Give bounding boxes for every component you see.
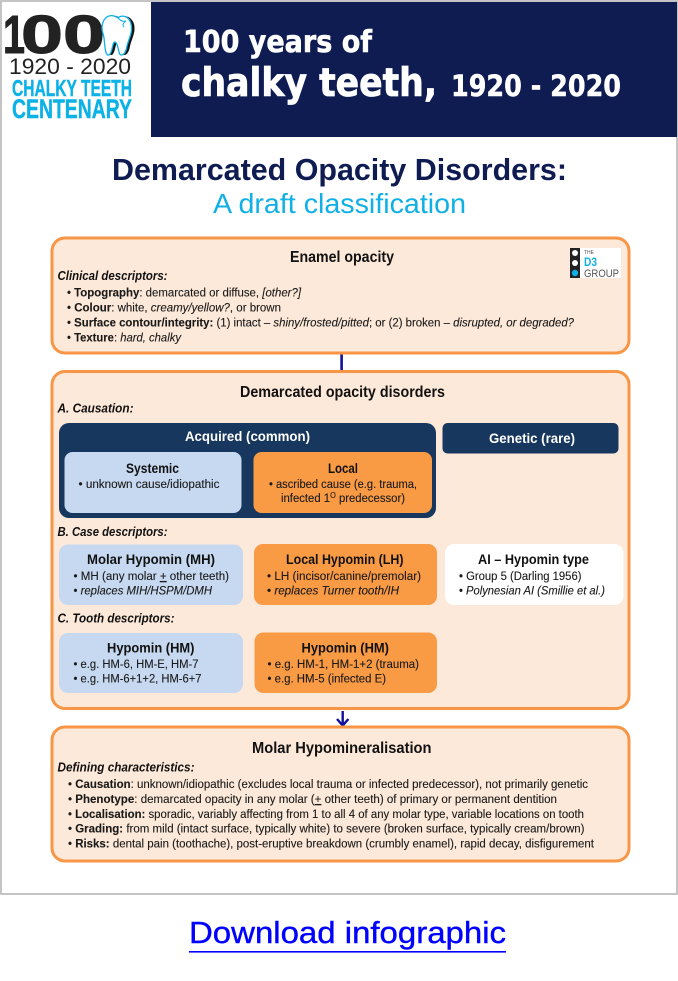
defining characteristics list: • Phenotype: demarcated opacity in any molar (+ other teeth) of primary or permanent dentition: [68, 792, 557, 806]
box: AI hypomin type: AI – Hypomin type: [478, 551, 589, 567]
box: hypomin local: • e.g. HM-5 (infected E): [268, 672, 386, 686]
box: local hypomin: • replaces Turner tooth/IH: [267, 584, 399, 598]
logo chalky teeth: CHALKY TEETH: [12, 75, 132, 101]
heading: enamel opacity: Enamel opacity: [290, 249, 394, 266]
box: acquired: [59, 423, 436, 518]
box: molar hypomin: [59, 544, 243, 605]
box: hypomin systemic: • e.g. HM-6, HM-E, HM-7: [74, 657, 199, 671]
logo years: 1920 - 2020: [9, 54, 131, 79]
clinical descriptors list: • Colour: white, creamy/yellow?, or brown: [67, 300, 281, 314]
label: case descriptors: B. Case descriptors:: [58, 525, 168, 539]
banner dates: 1920 - 2020: [451, 69, 621, 103]
box: hypomin local: [254, 632, 437, 693]
box: acquired: Acquired (common): [185, 428, 310, 444]
panel: demarcated opacity disorders: [52, 372, 629, 708]
box: local: infected 1: [281, 491, 334, 505]
label: defining characteristics: Defining characteristics:: [58, 760, 194, 774]
box: local: [254, 452, 432, 513]
icon: D3 group logo: D3: [584, 255, 597, 269]
box: local hypomin: • LH (incisor/canine/premolar): [267, 569, 421, 583]
box: genetic: [442, 423, 618, 454]
box: local: predecessor): [336, 491, 405, 505]
box: hypomin local: Hypomin (HM): [302, 640, 389, 656]
logo numerals: 00: [21, 5, 105, 65]
box: local: O: [330, 491, 336, 500]
box: AI hypomin type: [445, 544, 624, 605]
box: systemic: [64, 452, 242, 513]
icon: D3 group logo: THE: [584, 250, 595, 256]
title: Demarcated Opacity Disorders:: [112, 152, 567, 187]
clinical descriptors list: • Surface contour/integrity: (1) intact – shiny/frosted/pitted; or (2) broken – disrupted, or degraded?: [67, 316, 574, 330]
panel: molar hypomineralisation: [52, 727, 629, 861]
box: genetic: Genetic (rare): [489, 430, 575, 446]
defining characteristics list: [68, 777, 595, 850]
box: local hypomin: [254, 544, 437, 605]
banner line 2: chalky teeth,: [181, 61, 437, 106]
box: local hypomin: Local Hypomin (LH): [286, 551, 404, 567]
box: molar hypomin: Molar Hypomin (MH): [87, 551, 215, 567]
clinical descriptors list: • Topography: demarcated or diffuse, [other?]: [67, 286, 302, 300]
logo centenary: CENTENARY: [12, 94, 132, 124]
connector: enamel opacity to disorders: [340, 353, 343, 371]
label: causation: A. Causation:: [57, 402, 134, 416]
defining characteristics list: • Grading: from mild (intact surface, typically white) to severe (broken surface, typically cream/brown): [68, 822, 584, 836]
box: hypomin systemic: • e.g. HM-6+1+2, HM-6+7: [74, 672, 202, 686]
defining characteristics list: • Risks: dental pain (toothache), post-eruptive breakdown (crumbly enamel), rapid decay, disfigurement: [68, 836, 595, 850]
defining characteristics list: • Causation: unknown/idiopathic (excludes local trauma or infected predecessor), not primarily genetic: [68, 777, 588, 791]
panel: enamel opacity: [52, 238, 629, 353]
clinical descriptors label: Clinical descriptors:: [58, 269, 168, 283]
defining characteristics list: • Localisation: sporadic, variably affecting from 1 to all 4 of any molar type, variable locations on tooth: [68, 807, 584, 821]
heading: demarcated opacity disorders: Demarcated opacity disorders: [240, 384, 445, 401]
icon: tooth: [102, 16, 135, 55]
box: systemic: Systemic: [126, 460, 179, 476]
heading: molar hypomineralisation: Molar Hypomineralisation: [252, 740, 432, 757]
banner line 1: 100 years of: [183, 25, 373, 60]
box: molar hypomin: • MH (any molar + other teeth): [74, 569, 229, 583]
header banner: [151, 2, 677, 137]
box: molar hypomin: • replaces MIH/HSPM/DMH: [74, 584, 212, 598]
clinical descriptors list: • Texture: hard, chalky: [67, 330, 182, 344]
logo numerals: [3, 5, 105, 65]
box: hypomin systemic: Hypomin (HM): [107, 640, 194, 656]
logo: chalky teeth centenary: [3, 5, 135, 124]
box: AI hypomin type: • Group 5 (Darling 1956): [459, 569, 582, 583]
box: hypomin local: • e.g. HM-1, HM-1+2 (trauma): [268, 657, 419, 671]
clinical descriptors list: [67, 286, 574, 344]
subtitle: A draft classification: [213, 188, 466, 219]
icon: D3 group logo: GROUP: [584, 268, 619, 280]
box: AI hypomin type: • Polynesian AI (Smillie et al.): [459, 584, 605, 598]
label: tooth descriptors: C. Tooth descriptors:: [58, 612, 174, 626]
arrow: disorders to molar hypomineralisation: [337, 711, 348, 726]
box: hypomin systemic: [59, 633, 243, 693]
box: local: • ascribed cause (e.g. trauma,: [269, 477, 417, 491]
box: systemic: • unknown cause/idiopathic: [78, 477, 220, 491]
download link: Download infographic: [189, 915, 506, 950]
logo numerals: 1: [3, 5, 25, 65]
box: local: Local: [328, 460, 358, 476]
icon: D3 group logo: [570, 248, 621, 280]
